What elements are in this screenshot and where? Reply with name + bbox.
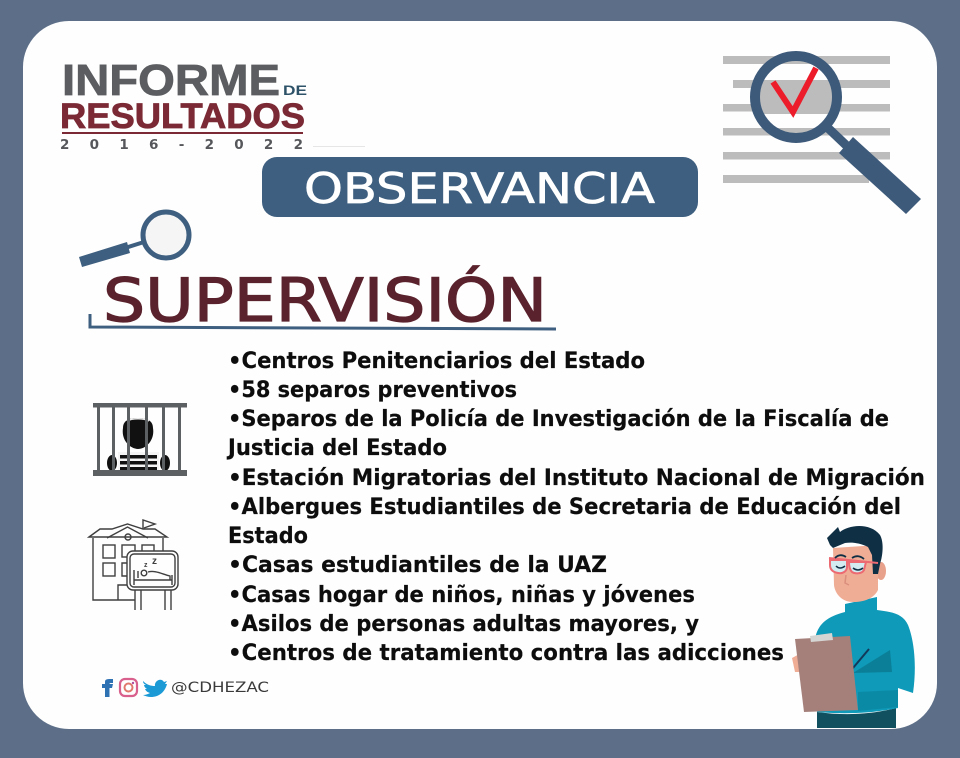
icon: shelter building with bed sign: z	[152, 556, 157, 567]
logo: Informe de Resultados 2016-2022: DE	[283, 82, 307, 98]
text block: list of supervised sites: •Asilos de personas adultas mayores, y	[228, 611, 699, 637]
text block: list of supervised sites: Estado	[228, 523, 308, 549]
icon: shelter building with bed sign: z	[144, 562, 148, 569]
logo: Informe de Resultados 2016-2022: 2016-2022	[60, 137, 303, 153]
text block: list of supervised sites: •Centros de tratamiento contra las adicciones	[228, 640, 784, 666]
icon: prisoner behind bars	[93, 403, 187, 476]
social media row: @CDHEZAC	[171, 680, 269, 696]
text block: list of supervised sites: •58 separos preventivos	[228, 377, 517, 403]
banner: Observancia: OBSERVANCIA	[304, 164, 655, 213]
text block: list of supervised sites: •Estación Migratorias del Instituto Nacional de Migración	[228, 465, 925, 491]
logo: Informe de Resultados 2016-2022: INFORME	[62, 56, 280, 105]
text block: list of supervised sites	[226, 348, 925, 666]
text block: list of supervised sites: •Casas hogar de niños, niñas y jóvenes	[228, 582, 695, 608]
text block: list of supervised sites: •Albergues Estudiantiles de Secretaria de Educación del	[228, 494, 901, 520]
text block: list of supervised sites: •Centros Penitenciarios del Estado	[228, 348, 645, 374]
text block: list of supervised sites: •Casas estudiantiles de la UAZ	[228, 552, 607, 578]
icon: document with magnifying glass and check	[723, 56, 921, 214]
banner: Observancia	[262, 157, 698, 217]
icon: small magnifying glass	[79, 212, 189, 267]
text block: list of supervised sites: •Separos de la Policía de Investigación de la Fiscalía de	[228, 406, 889, 432]
logo: Informe de Resultados 2016-2022	[60, 56, 365, 153]
icon: shelter building with bed sign	[89, 520, 178, 610]
logo: Informe de Resultados 2016-2022: RESULTADOS	[60, 97, 305, 136]
social media row	[102, 679, 269, 697]
illustration: man with clipboard	[792, 526, 915, 728]
text block: list of supervised sites: Justicia del Estado	[226, 435, 447, 461]
heading: Supervisión: SUPERVISIÓN	[103, 265, 547, 336]
